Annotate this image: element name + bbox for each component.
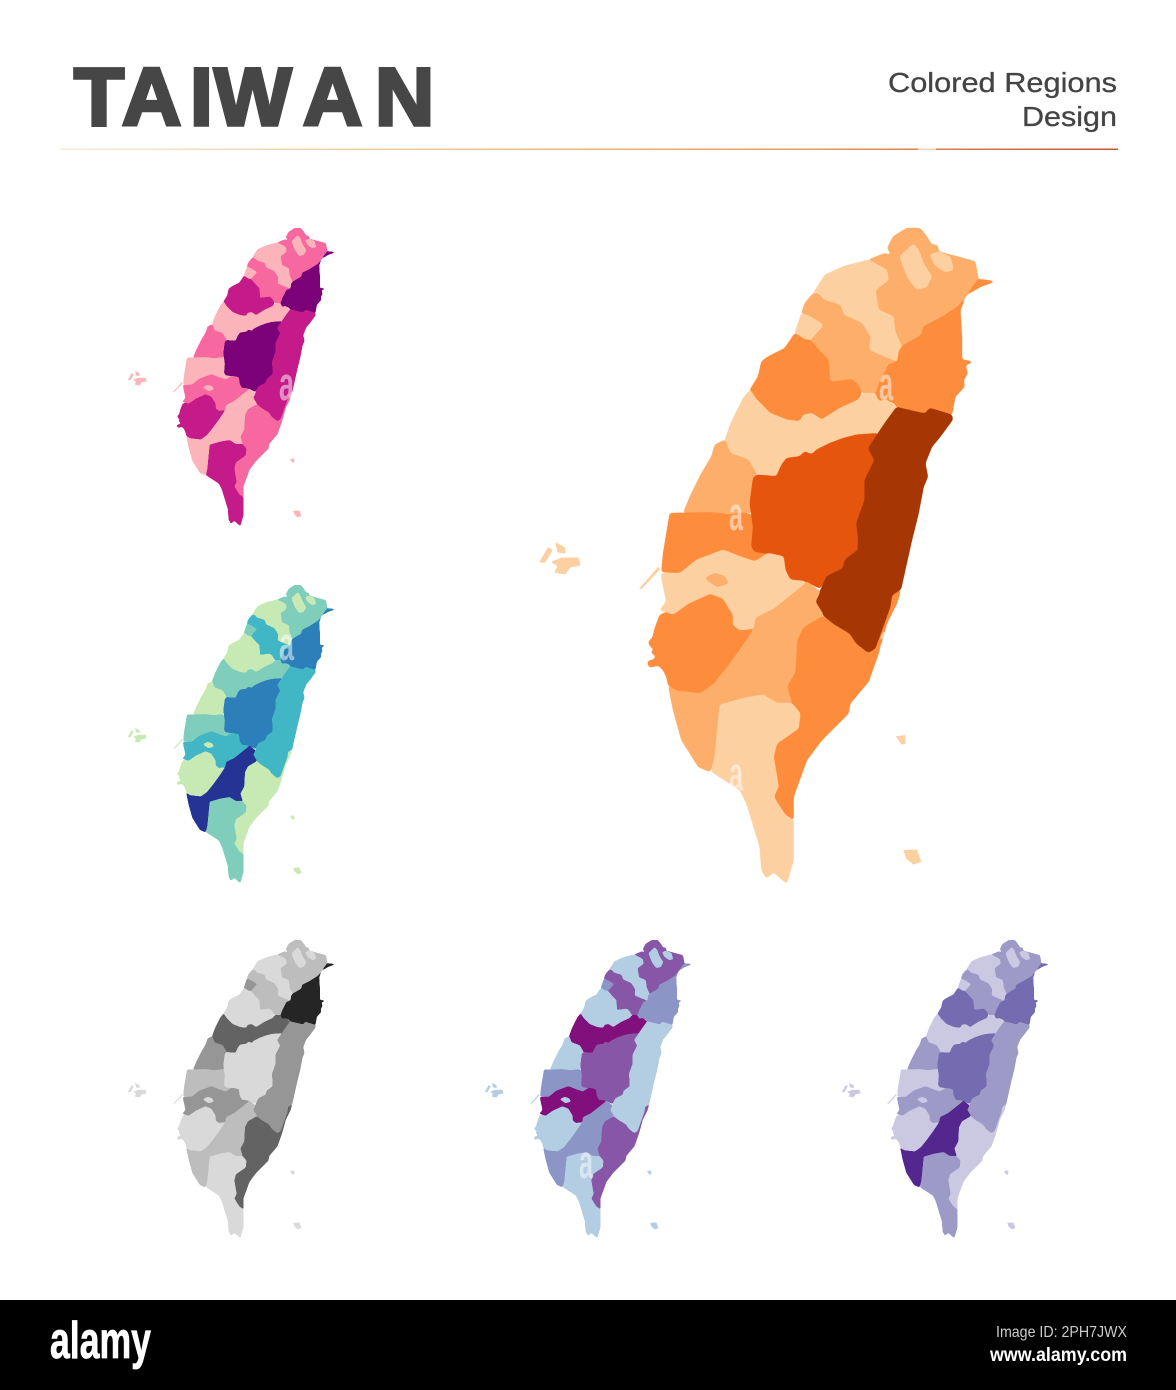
footer logo: alamy (50, 1312, 151, 1370)
watermark letters (279, 357, 893, 1188)
footer image id: Image ID: 2PH7JWX (996, 1324, 1127, 1341)
map: small pink Taiwan (128, 228, 335, 526)
map: small blue-purple Taiwan (485, 940, 692, 1238)
map: large orange Taiwan (540, 228, 995, 883)
footer bar (0, 1300, 1176, 1390)
subtitle: Colored Regions (888, 67, 1117, 98)
watermark letters: a (279, 357, 294, 410)
watermark letters: a (879, 614, 893, 667)
watermark letters: a (579, 1135, 593, 1188)
watermark letters: a (729, 487, 743, 540)
map: small teal Taiwan (128, 585, 335, 883)
footer website: www.alamy.com (989, 1345, 1127, 1366)
title: TAIWAN (74, 52, 434, 143)
map: small gray Taiwan (128, 940, 335, 1238)
map: small lavender Taiwan (842, 940, 1049, 1238)
subtitle: Design (1022, 101, 1117, 132)
watermark letters: a (879, 357, 893, 410)
subtitle (888, 67, 1117, 132)
watermark letters: a (729, 747, 743, 800)
watermark letters: a (279, 617, 294, 670)
